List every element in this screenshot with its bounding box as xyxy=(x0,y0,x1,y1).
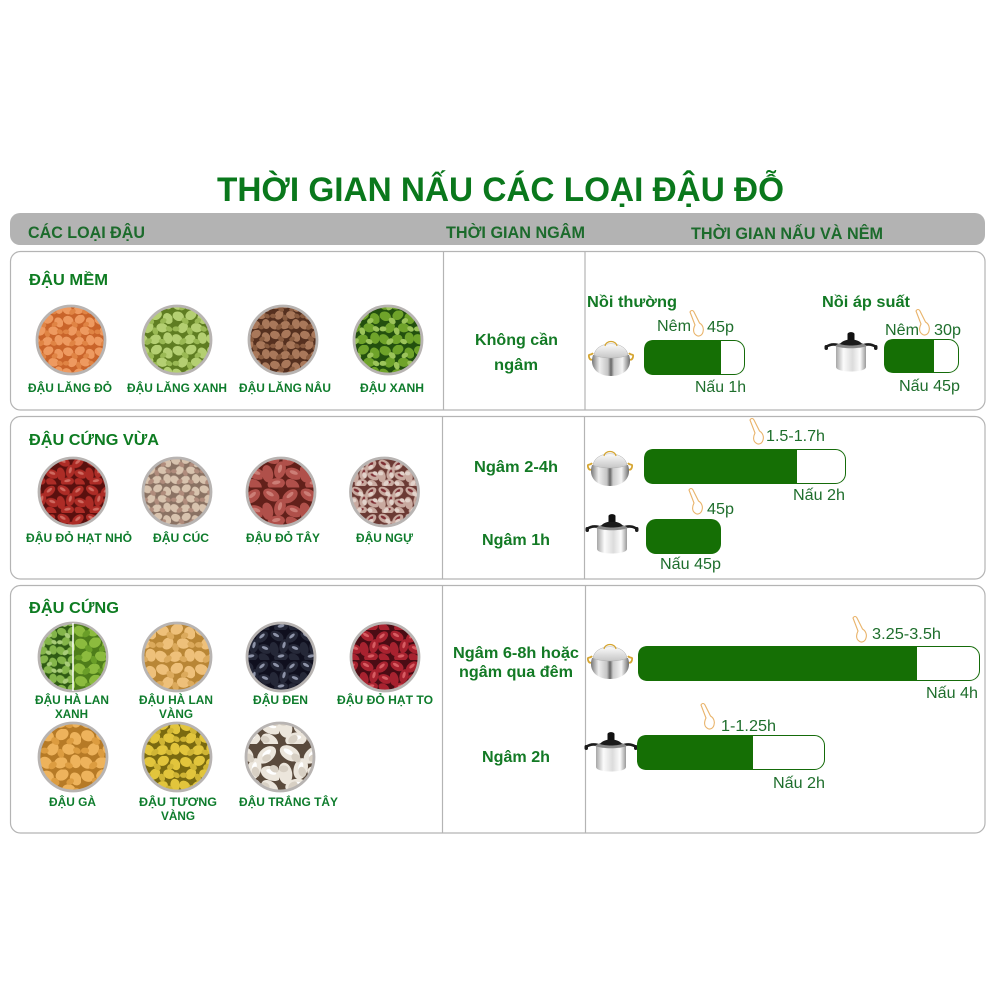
panel: hard beans xyxy=(10,586,985,833)
bean: soybean: ĐẬU TƯƠNG xyxy=(139,794,217,809)
bean: kidney xyxy=(246,458,320,545)
bean: pinto xyxy=(143,458,211,545)
bean: green pea: ĐẬU HÀ LAN xyxy=(35,692,109,707)
cook time label: Nấu 45p xyxy=(899,378,960,395)
icon: regular pot xyxy=(588,644,632,679)
season time label xyxy=(657,318,734,336)
cook time label: Nấu 4h xyxy=(926,685,978,702)
column heading: soak time: THỜI GIAN NGÂM xyxy=(446,223,585,242)
cook time label: Nấu 2h xyxy=(773,775,825,792)
bean: speckled: ĐẬU NGỰ xyxy=(356,530,413,545)
season time label xyxy=(885,322,961,339)
soak time: 2h: Ngâm 2h xyxy=(482,749,550,766)
icon: regular pot xyxy=(589,342,633,376)
cook time label: Nấu 2h xyxy=(793,487,845,504)
bean: kidney: ĐẬU ĐỎ TÂY xyxy=(246,530,320,545)
soak time: 6-8h or overnight xyxy=(453,645,579,681)
bean: green lentil: ĐẬU LĂNG XANH xyxy=(127,380,227,395)
title: THỜI GIAN NẤU CÁC LOẠI ĐẬU ĐỖ xyxy=(217,171,784,209)
soak time: no soak: ngâm xyxy=(494,357,538,374)
bean: red lentil: ĐẬU LĂNG ĐỎ xyxy=(28,380,112,395)
bean: chickpea: ĐẬU GÀ xyxy=(49,794,96,809)
cook time label: Nấu 1h xyxy=(695,379,746,396)
soak time: 6-8h or overnight: ngâm qua đêm xyxy=(459,664,573,681)
icon: spoon xyxy=(701,704,714,729)
bean: mung: ĐẬU XANH xyxy=(360,380,424,395)
icon: spoon xyxy=(750,418,763,444)
icon: pressure cooker xyxy=(824,332,878,372)
bar: pressure cooker 45p xyxy=(646,519,721,554)
column heading: bean types: CÁC LOẠI ĐẬU xyxy=(28,223,145,242)
bean: yellow pea xyxy=(139,623,213,721)
icon: pressure cooker xyxy=(584,732,638,772)
season time label: 45p xyxy=(707,319,734,336)
bean: pinto: ĐẬU CÚC xyxy=(153,530,209,545)
bean: brown lentil xyxy=(239,306,331,395)
bean: soybean: VÀNG xyxy=(161,808,195,823)
heading: hard beans: ĐẬU CỨNG xyxy=(29,598,119,617)
icon: spoon xyxy=(916,310,929,335)
bean: yellow pea: VÀNG xyxy=(159,706,193,721)
bean: white kidney xyxy=(239,723,338,809)
bar: regular pot 2h xyxy=(644,449,846,484)
panel: soft beans xyxy=(10,252,985,410)
season time label: 1.5-1.7h xyxy=(766,428,825,445)
bean: large red: ĐẬU ĐỎ HẠT TO xyxy=(337,692,433,707)
soak time: no soak xyxy=(475,332,558,374)
bean: speckled xyxy=(350,458,418,545)
bean: black xyxy=(247,623,315,707)
panel: medium-hard beans xyxy=(10,416,985,579)
soak time: 6-8h or overnight: Ngâm 6-8h hoặc xyxy=(453,645,579,662)
label: pressure cooker: Nồi áp suất xyxy=(822,294,910,311)
bean: red lentil xyxy=(28,306,112,395)
bean: white kidney: ĐẬU TRẮNG TÂY xyxy=(239,794,338,809)
bean: yellow pea: ĐẬU HÀ LAN xyxy=(139,692,213,707)
bar: regular pot 1h xyxy=(644,340,744,375)
season time label: 30p xyxy=(934,322,961,339)
icon: spoon xyxy=(690,310,703,336)
column heading: cook and season time: THỜI GIAN NẤU VÀ NÊM xyxy=(691,224,883,243)
bean: green lentil xyxy=(127,306,227,395)
soak time: 2-4h: Ngâm 2-4h xyxy=(474,459,558,476)
soak time: no soak: Không cần xyxy=(475,332,558,349)
bar: pressure cooker 45p xyxy=(884,339,958,373)
icon: spoon xyxy=(689,488,702,514)
bean: soybean xyxy=(139,723,217,823)
season time label: 3.25-3.5h xyxy=(872,626,941,643)
icon: spoon xyxy=(853,616,866,642)
bean: green pea: XANH xyxy=(55,707,88,721)
season time label: Nêm xyxy=(885,322,919,339)
bean: brown lentil: ĐẬU LĂNG NÂU xyxy=(239,380,331,395)
heading: soft beans: ĐẬU MỀM xyxy=(29,270,108,289)
soak time: 1h: Ngâm 1h xyxy=(482,532,550,549)
bean: small red bean xyxy=(26,458,132,545)
bean: green pea xyxy=(35,623,109,721)
label: regular pot: Nồi thường xyxy=(587,294,677,311)
season time label: 1-1.25h xyxy=(721,718,776,735)
bean: mung xyxy=(354,306,424,395)
table header bar xyxy=(10,213,985,245)
season time label: 45p xyxy=(707,501,734,518)
season time label: Nêm xyxy=(657,318,691,335)
icon: regular pot xyxy=(588,452,632,486)
bean: large red xyxy=(337,623,433,707)
bar: regular pot 4h xyxy=(638,646,980,681)
bean: black: ĐẬU ĐEN xyxy=(253,692,308,707)
bar: pressure cooker 2h xyxy=(637,735,824,770)
cook time label: Nấu 45p xyxy=(660,556,721,573)
icon: pressure cooker xyxy=(586,514,638,554)
bean: chickpea xyxy=(39,723,107,809)
bean: small red bean: ĐẬU ĐỎ HẠT NHỎ xyxy=(26,530,132,545)
heading: medium-hard beans: ĐẬU CỨNG VỪA xyxy=(29,430,159,449)
